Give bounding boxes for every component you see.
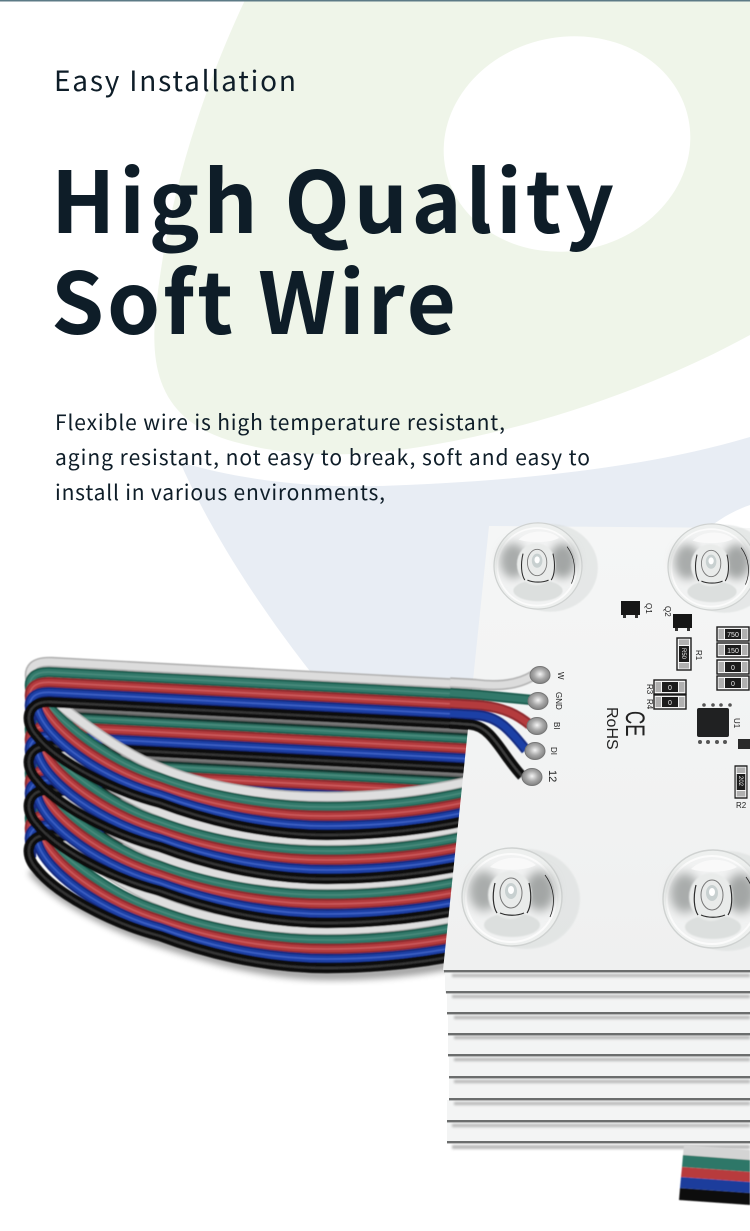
resistor array: 150 bbox=[727, 648, 739, 655]
resistor R2: R2 bbox=[736, 801, 747, 810]
green wire bbox=[450, 693, 532, 700]
lower board stack bbox=[444, 970, 750, 1149]
pin labels: BI bbox=[552, 722, 561, 730]
transistor Q2: Q2 bbox=[663, 606, 672, 617]
solder pins bbox=[522, 666, 550, 786]
resistor array: 0 bbox=[731, 665, 735, 672]
LED lens bottom left bbox=[462, 848, 580, 949]
resistor array: 750 bbox=[727, 632, 739, 639]
main title bbox=[51, 135, 614, 359]
pin labels: GND bbox=[554, 692, 563, 710]
CE and RoHS marks: RoHS bbox=[603, 707, 620, 750]
background: green blob bbox=[154, 0, 750, 454]
pin labels: DI bbox=[549, 747, 558, 755]
resistor array: 0 bbox=[731, 681, 735, 688]
resistor R1 bbox=[677, 638, 703, 670]
pin labels: W bbox=[556, 672, 565, 680]
resistor R2: 202 bbox=[737, 776, 743, 787]
resistors R3 R4: 0 bbox=[668, 700, 672, 707]
blue wire bbox=[450, 714, 526, 750]
background: white circle bbox=[423, 14, 711, 274]
resistor array bbox=[717, 627, 749, 690]
resistor R1: R1 bbox=[694, 650, 703, 661]
eyebrow heading: Easy Installation bbox=[54, 60, 296, 100]
main title: High Quality bbox=[51, 135, 614, 258]
coiled ribbon wire bbox=[29, 662, 480, 975]
pin labels: 12 bbox=[546, 770, 558, 782]
description text: install in various environments, bbox=[55, 477, 385, 507]
white wire bbox=[450, 675, 534, 685]
black wire bbox=[450, 723, 522, 776]
main title: Soft Wire bbox=[51, 236, 456, 359]
resistors R3 R4: R3 bbox=[645, 684, 654, 695]
transistor Q1 bbox=[621, 601, 653, 618]
resistor R2 bbox=[735, 766, 747, 810]
transistor Q1: Q1 bbox=[644, 603, 653, 614]
LED lens bottom right bbox=[663, 850, 750, 951]
LED lens top right bbox=[668, 524, 750, 613]
resistors R3 R4: 0 bbox=[668, 685, 672, 692]
wire ends soldered to board bbox=[450, 675, 534, 776]
chip U1 bbox=[697, 703, 741, 744]
chip U1: U1 bbox=[732, 718, 741, 729]
description text: aging resistant, not easy to break, soft and easy to bbox=[55, 442, 590, 472]
bottom ribbon wire fragment bbox=[679, 1145, 750, 1205]
resistor R1: R50 bbox=[680, 648, 686, 660]
background: blue crescent bbox=[180, 437, 750, 690]
pin labels bbox=[546, 672, 565, 782]
LED lens top left bbox=[494, 523, 598, 612]
description text bbox=[55, 407, 590, 507]
CE and RoHS marks: CE bbox=[620, 711, 651, 736]
CE and RoHS marks bbox=[603, 707, 651, 750]
resistors R3 R4 bbox=[645, 680, 686, 710]
transistor Q2 bbox=[663, 606, 692, 631]
top circuit board bbox=[443, 523, 750, 970]
resistors R3 R4: R4 bbox=[645, 699, 654, 710]
red wire bbox=[450, 704, 530, 725]
top rule bbox=[0, 0, 750, 2]
description text: Flexible wire is high temperature resistant, bbox=[55, 407, 505, 437]
small capacitor bbox=[738, 739, 750, 749]
